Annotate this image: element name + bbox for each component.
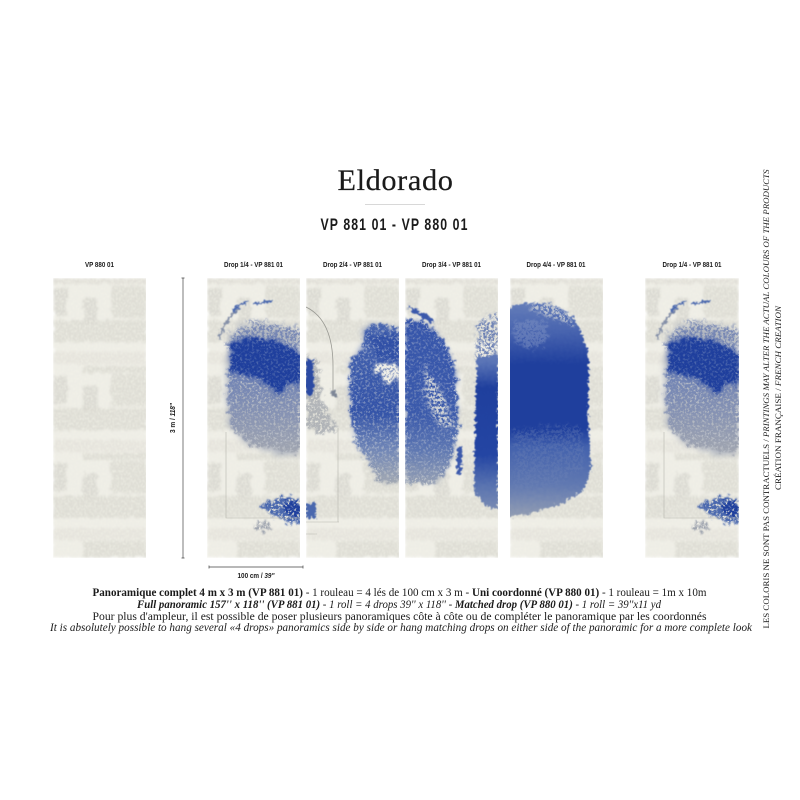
product description text block: Full panoramic 157'' x 118'' (VP 881 01) - 1 roll = 4 drops 39'' x 118'' - Matched drop (VP 880 01) - 1 roll = 39''x11 yd xyxy=(136,599,661,611)
drop label: Drop 1/4 - VP 881 01 xyxy=(662,260,722,269)
height label: 3 m / 118" xyxy=(170,402,177,433)
panel: plain matched drop VP 880 01 xyxy=(53,260,147,558)
width label: 100 cm / 39" xyxy=(238,573,275,580)
product description text block: Pour plus d'ampleur, il est possible de poser plusieurs panoramiques côte à côte ou de compléter le panoramique par les coordonnés xyxy=(92,611,707,623)
panel: drop 1/4 xyxy=(207,260,301,558)
panel: drop 3/4 xyxy=(405,260,499,558)
title: Eldorado xyxy=(338,164,454,197)
width dimension arrow xyxy=(209,566,303,580)
reference codes heading: VP 881 01 - VP 880 01 xyxy=(320,215,468,234)
panel: drop 4/4 xyxy=(506,260,604,558)
drop label: Drop 1/4 - VP 881 01 xyxy=(224,260,283,269)
vertical disclaimer text: CRÉATION FRANÇAISE / FRENCH CREATION xyxy=(773,305,783,490)
drop label: Drop 4/4 - VP 881 01 xyxy=(526,260,586,269)
drop label: Drop 3/4 - VP 881 01 xyxy=(422,260,481,269)
product description text block xyxy=(49,587,753,634)
drop label: Drop 2/4 - VP 881 01 xyxy=(323,260,382,269)
height dimension arrow xyxy=(170,278,184,558)
drop label: VP 880 01 xyxy=(85,260,114,269)
product description text block: It is absolutely possible to hang several «4 drops» panoramics side by side or hang matching drops on either side of the panoramic for a more complete look xyxy=(49,622,753,634)
vertical disclaimer text: LES COLORIS NE SONT PAS CONTRACTUELS / PRINTINGS MAY ALTER THE ACTUAL COLOURS OF THE PRODUCTS xyxy=(761,169,771,629)
panel: repeated drop 1/4 xyxy=(645,260,739,558)
vertical disclaimer text xyxy=(761,169,783,628)
panel: drop 2/4 xyxy=(306,260,400,558)
product description text block: Panoramique complet 4 m x 3 m (VP 881 01) - 1 rouleau = 4 lés de 100 cm x 3 m - Uni coordonné (VP 880 01) - 1 rouleau = 1m x 10m xyxy=(92,587,707,599)
